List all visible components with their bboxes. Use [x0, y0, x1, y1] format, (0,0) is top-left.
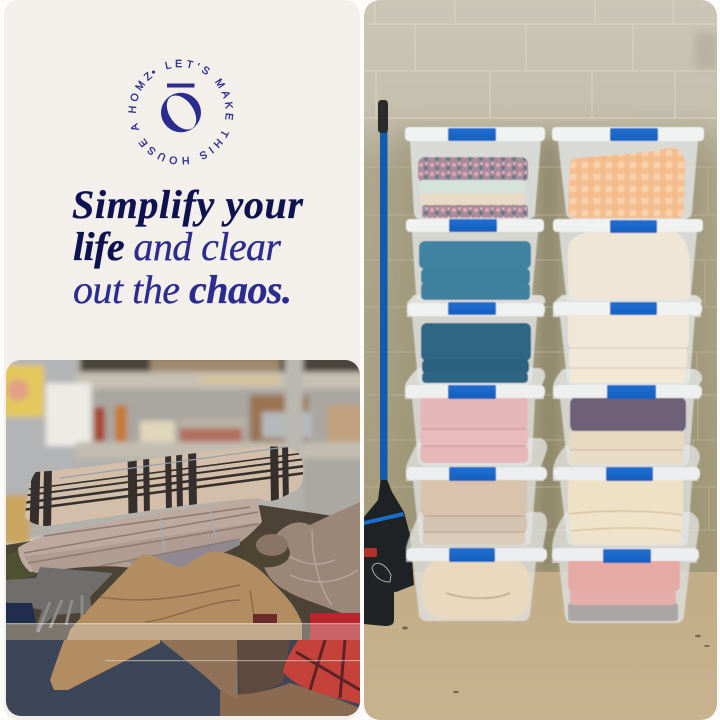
- shaded wall corner: [695, 32, 717, 68]
- blue latch: [610, 128, 658, 141]
- blurred shelf background: [0, 350, 370, 545]
- dark teal folded blankets: [421, 323, 531, 361]
- grey fold: [568, 603, 678, 621]
- navy fabric: [6, 603, 36, 623]
- blue latch: [610, 220, 657, 233]
- grey fringed scarf: [6, 567, 113, 632]
- pink fold lower: [570, 589, 676, 605]
- motor oil bottle: [364, 548, 394, 626]
- pink folded blankets: [420, 397, 528, 429]
- translucent bin: [6, 623, 360, 716]
- beige fold upper: [569, 431, 684, 451]
- panel: left cream background: [4, 0, 360, 720]
- bin R6: [552, 512, 699, 623]
- middle taupe folded blankets: [18, 497, 262, 573]
- denim through plastic: [6, 640, 360, 716]
- circular tagline: • LET'S MAKE THIS HOUSE A HOMZ: [128, 60, 234, 165]
- bin L4: [405, 368, 545, 466]
- cream folded blankets: [568, 477, 683, 516]
- tan fabric through plastic: [50, 640, 160, 690]
- heading line 2: life and clear: [73, 224, 281, 269]
- floral fold top: [418, 157, 528, 183]
- cream blanket: [568, 229, 690, 299]
- brown fabric through plastic, bottom: [220, 683, 360, 716]
- bin R3: [553, 295, 702, 385]
- purple fold: [570, 397, 686, 432]
- gingham blanket: [568, 148, 685, 218]
- heading line 1: Simplify your: [72, 182, 303, 227]
- wall: [364, 0, 717, 580]
- brick mortar lines: [364, 0, 717, 118]
- mint fold: [419, 180, 526, 194]
- heading line 3: out the chaos.: [73, 267, 292, 312]
- red flannel top: [253, 613, 360, 640]
- dark base under pile: [6, 505, 360, 640]
- blue latch: [607, 385, 656, 399]
- photo: pile of blankets in storage bin: [0, 350, 370, 716]
- tan shirt: [66, 552, 302, 640]
- bin R4: [553, 369, 702, 466]
- top plaid blanket: [25, 446, 304, 526]
- bin R5: [553, 445, 700, 546]
- logo badge: [128, 60, 234, 165]
- bin R1: [552, 127, 704, 219]
- bin L1: [405, 127, 545, 219]
- bin L2: [406, 219, 544, 301]
- heading: [72, 182, 303, 312]
- bin rim: [6, 624, 360, 640]
- broom handle: [380, 130, 388, 480]
- wall shadow behind bins: [396, 126, 710, 498]
- bin L3: [407, 295, 545, 385]
- blue latch: [448, 385, 496, 399]
- beige folded blankets: [421, 477, 527, 516]
- moss and dark fold: [262, 546, 290, 568]
- blue latch: [610, 302, 657, 315]
- blue latch: [448, 128, 496, 141]
- blue latch: [603, 549, 651, 563]
- bins: right column: [552, 127, 704, 623]
- blue latch: [449, 219, 497, 232]
- bin L5: [406, 438, 547, 546]
- broom: [364, 100, 414, 592]
- photo: stacked storage bins in a garage: [364, 0, 717, 720]
- floor: [364, 572, 717, 720]
- floral fold bottom: [422, 205, 528, 218]
- broom band: [364, 512, 404, 525]
- beige fold lower: [570, 450, 683, 464]
- taupe blanket, right: [262, 502, 360, 622]
- bins: left column: [405, 127, 547, 621]
- logo mark: letter o: [161, 90, 202, 135]
- blue latch: [449, 548, 495, 562]
- cream folded blankets: [568, 311, 689, 349]
- red flannel through plastic: [283, 640, 360, 704]
- blue latch: [449, 467, 496, 481]
- blue latch: [606, 467, 653, 481]
- bin L6: [406, 512, 547, 621]
- broom head: [364, 477, 414, 592]
- cream fold: [420, 193, 525, 205]
- pink fold upper: [568, 558, 680, 591]
- rolled cream blanket: [422, 558, 530, 619]
- dark brown through plastic: [237, 640, 290, 700]
- logo mark: bar: [167, 84, 194, 88]
- teal folded blankets: [419, 241, 531, 269]
- bin R2: [553, 219, 703, 301]
- floor specks: [402, 626, 710, 693]
- blue latch: [448, 302, 496, 315]
- broom grip: [378, 100, 388, 133]
